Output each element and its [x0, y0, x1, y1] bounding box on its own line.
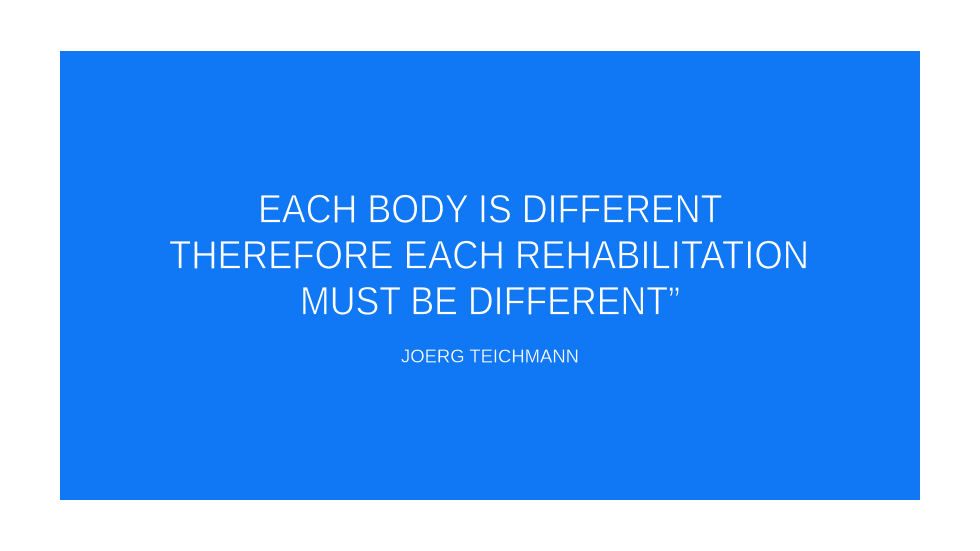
- panel: blue background: [60, 51, 920, 500]
- quote text: [169, 187, 809, 323]
- quote attribution: JOERG TEICHMANN: [401, 346, 579, 366]
- quote text: EACH BODY IS DIFFERENT: [258, 187, 722, 231]
- quote text: THEREFORE EACH REHABILITATION: [169, 233, 809, 277]
- quote text: MUST BE DIFFERENT”: [300, 279, 680, 323]
